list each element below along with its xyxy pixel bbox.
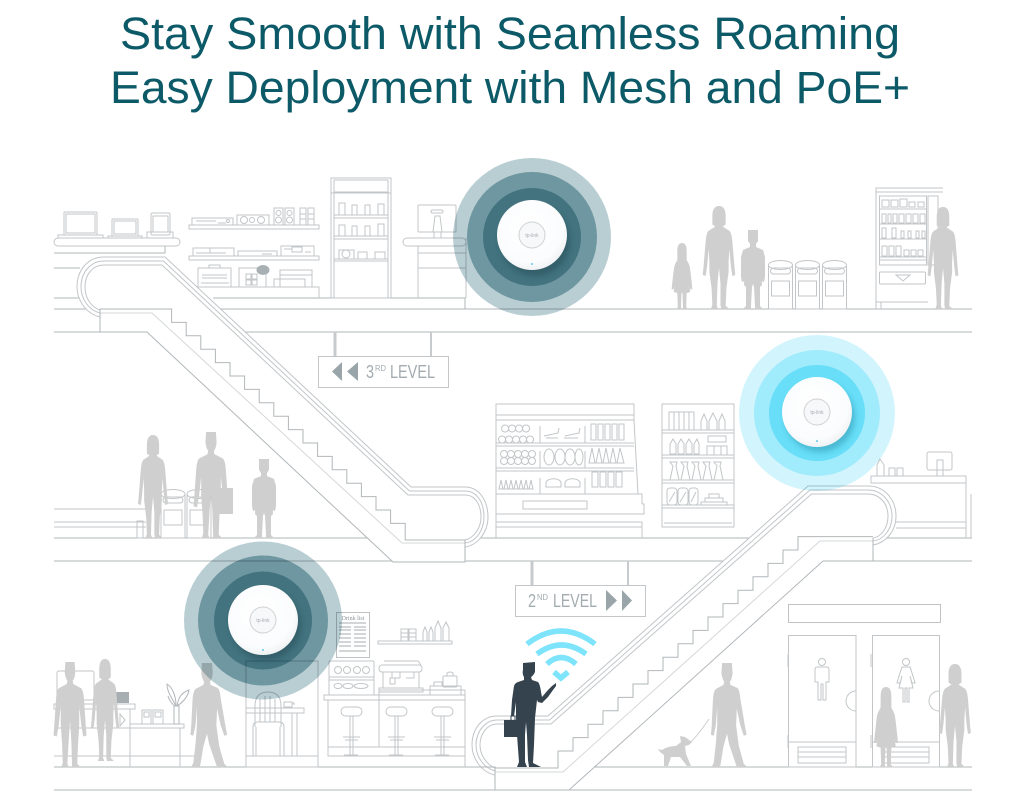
right escalator: [465, 486, 896, 790]
trash bins top floor: [768, 260, 846, 309]
store: audio shelves: [189, 208, 319, 298]
sign: 3rd level: 3: [366, 362, 374, 382]
access point bottom: tp-link: [256, 618, 270, 624]
access point mid: tp-link: [810, 410, 824, 416]
sign: 2nd level: LEVEL: [553, 591, 597, 611]
people: middle floor: [138, 432, 276, 538]
access point mid: [782, 377, 855, 452]
businessman with briefcase: [504, 662, 556, 767]
sign: 3rd level: LEVEL: [390, 362, 435, 382]
icon: laptop on desk: [112, 692, 129, 703]
drink list board: [336, 612, 370, 658]
coffee machine: [379, 661, 423, 692]
sign: 2nd level: 2: [528, 591, 536, 611]
sign: 2nd level: ND: [537, 593, 548, 602]
plant: [167, 684, 189, 724]
icon: gray speaker dome: [256, 265, 270, 275]
refrigerated food display: [496, 404, 644, 538]
access point bottom: [228, 585, 301, 660]
grocery shelf: [662, 404, 734, 527]
cafe booth with chair and table: [246, 661, 318, 767]
access point top: [497, 200, 570, 276]
bar counter with stools: [324, 690, 465, 767]
drink list board: Drink list: [342, 616, 365, 622]
restroom signboard: [788, 604, 940, 622]
signal rings: AP bottom: [184, 542, 342, 700]
desk and monitor: [54, 671, 200, 767]
icon: wifi signal: [527, 631, 595, 678]
signal rings: AP mid: [739, 335, 895, 491]
store: laptop counter: [54, 212, 180, 246]
sign: 3rd level: RD: [375, 364, 386, 373]
bench and mid bins: [54, 490, 211, 538]
checkout counter mid floor: [871, 452, 971, 538]
door: women: [871, 636, 940, 767]
vending machine: [876, 188, 943, 309]
pastry display: [329, 661, 374, 695]
people: bottom floor left: [54, 659, 228, 767]
access point top: tp-link: [525, 233, 539, 239]
title: Easy Deployment with Mesh and PoE+: [110, 62, 910, 113]
sign: 3rd level: [318, 332, 448, 388]
signal rings: AP top: [453, 158, 611, 316]
title: Stay Smooth with Seamless Roaming: [120, 8, 900, 59]
door: men: [788, 636, 856, 767]
top escalator: [77, 257, 488, 562]
bottle shelf: [378, 621, 452, 644]
people: top floor: [672, 206, 958, 309]
store: point of sale counter: [403, 205, 466, 298]
counter items: [430, 672, 461, 695]
dog on leash: [658, 719, 709, 766]
title: [110, 8, 910, 113]
people: bottom floor right: [711, 663, 971, 767]
floors: [54, 246, 972, 790]
store: camera cabinet: [331, 178, 391, 298]
sign: 2nd level: [516, 561, 646, 616]
